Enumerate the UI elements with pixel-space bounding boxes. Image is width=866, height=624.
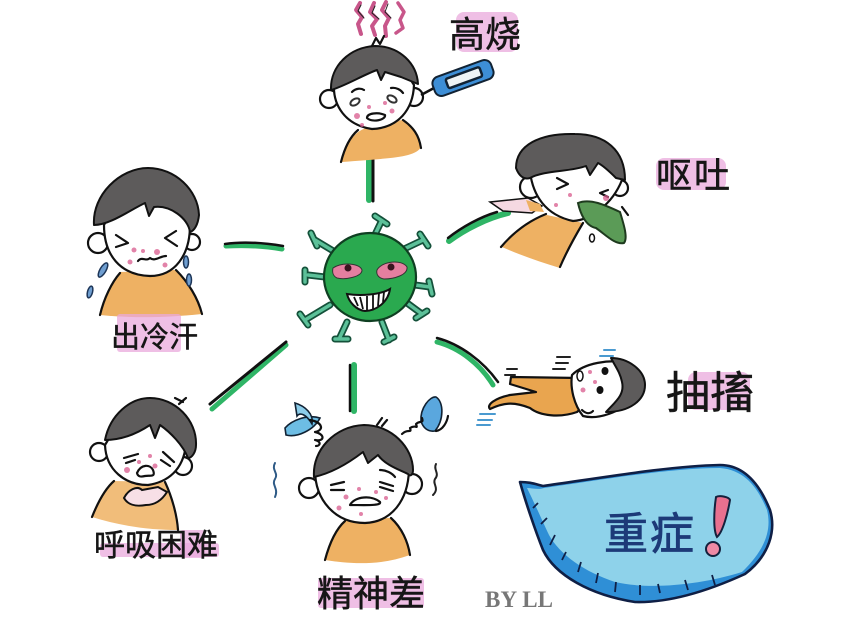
virus spikes <box>300 216 432 342</box>
body <box>100 270 202 317</box>
thermometer <box>421 58 496 98</box>
bubble shape <box>520 465 772 602</box>
shake marks <box>477 350 615 425</box>
arm <box>490 198 542 213</box>
body and limbs <box>489 377 585 415</box>
body <box>342 120 421 162</box>
symptom: high fever <box>320 2 521 162</box>
body <box>325 518 410 563</box>
label: 高烧 <box>449 14 521 55</box>
connector: virus to high fever <box>369 158 373 201</box>
connector: virus to cold sweat <box>225 243 283 249</box>
dizzy spirals <box>285 397 448 446</box>
virus grin <box>347 289 390 311</box>
head <box>299 418 422 523</box>
body <box>502 215 583 268</box>
central virus <box>300 216 432 342</box>
symptom: poor spirits <box>274 397 448 614</box>
speech bubble: severe illness <box>520 465 772 602</box>
connector: virus to vomiting <box>448 212 508 241</box>
connector: virus to breathing difficulty <box>210 342 286 409</box>
head <box>516 134 628 221</box>
label: 呼吸困难 <box>94 528 218 563</box>
label: 精神差 <box>317 573 425 614</box>
exclamation mark <box>706 496 730 556</box>
symptom: cold sweat <box>86 168 202 354</box>
connector: virus to seizure <box>437 338 498 385</box>
head <box>320 36 423 129</box>
symptom: seizure <box>477 350 754 425</box>
label: 呕吐 <box>656 155 730 196</box>
virus eyes <box>333 262 407 279</box>
signature: BY LL <box>485 587 553 612</box>
label: 出冷汗 <box>111 321 198 354</box>
bubble inner <box>527 468 769 586</box>
head <box>571 358 645 417</box>
label: 抽搐 <box>666 369 754 418</box>
vomit <box>578 201 628 243</box>
body <box>92 481 178 530</box>
hand on chest <box>124 487 167 506</box>
connector: virus to poor spirits <box>350 365 354 411</box>
rim ticks <box>533 503 715 595</box>
heat waves <box>356 2 404 36</box>
head <box>90 398 196 485</box>
sweat drops <box>86 256 192 298</box>
symptom: vomiting <box>490 134 730 268</box>
bubble text: 重症 <box>604 510 694 559</box>
virus body <box>324 233 416 321</box>
head <box>88 168 200 276</box>
symptom: breathing difficulty <box>90 398 219 563</box>
shake marks <box>274 463 437 497</box>
